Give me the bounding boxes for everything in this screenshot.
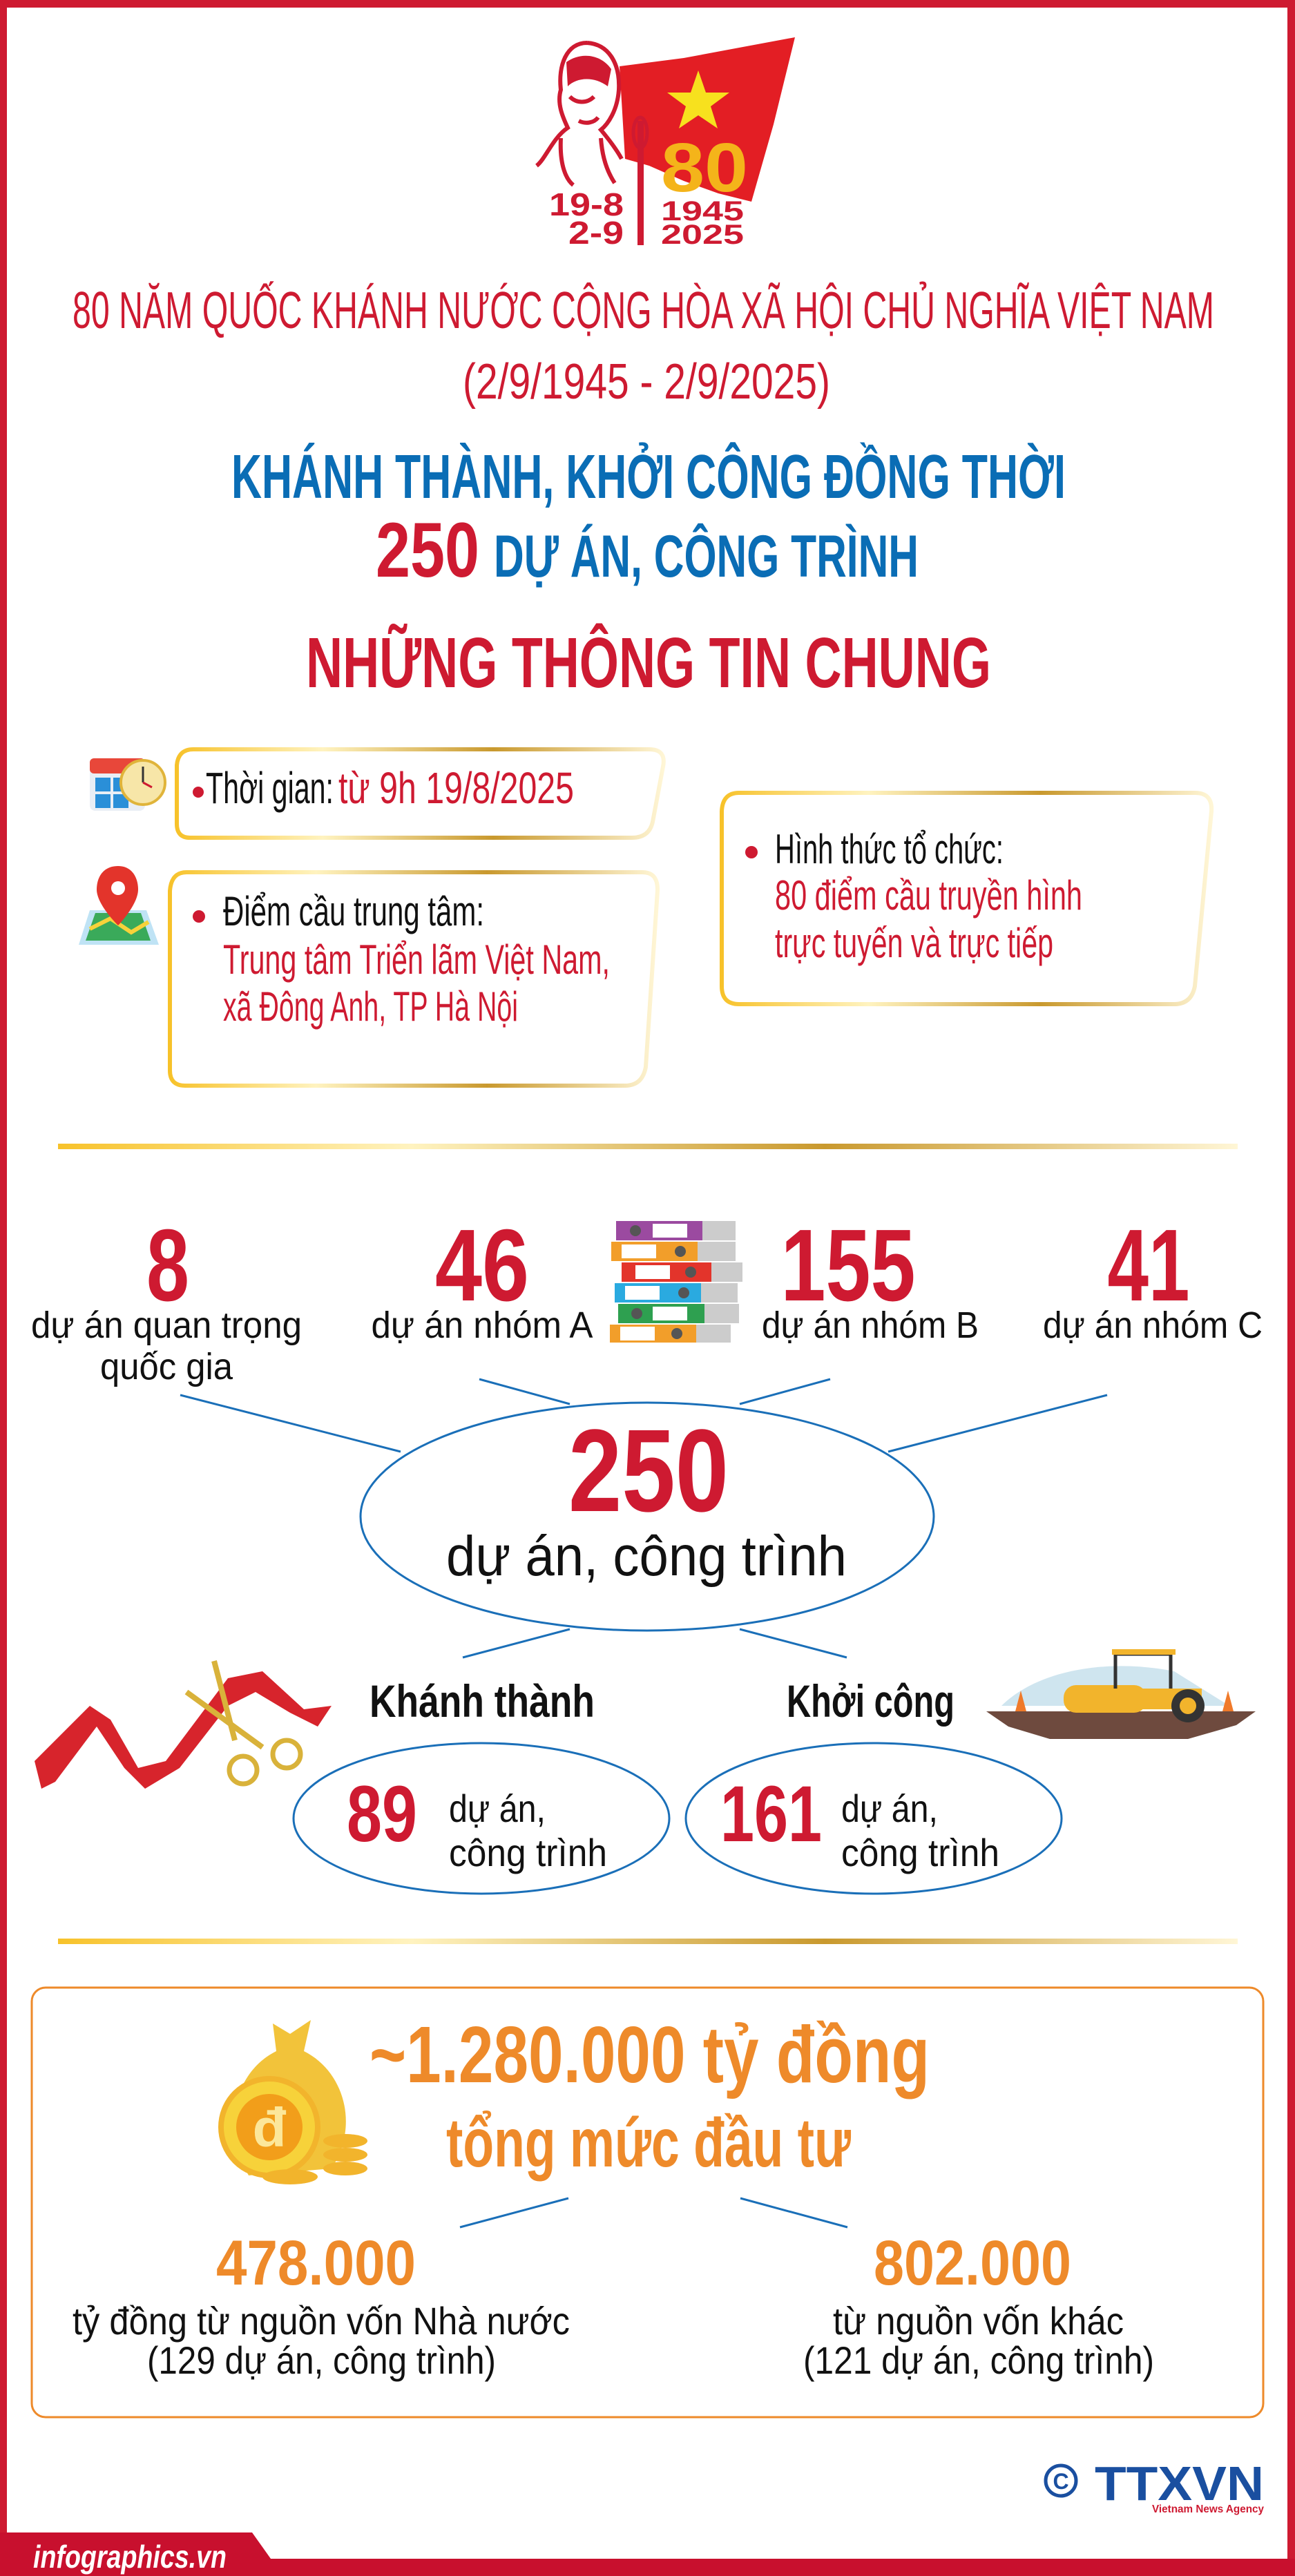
panel: central venue: Điểm cầu trung tâm: [223,888,484,934]
label: inauguration: Khánh thành [370,1675,595,1727]
ellipse: inaugurated 89 [294,1743,669,1894]
icon: money bag [221,2020,367,2184]
stat: group A [372,1209,593,1346]
panel: format: Hình thức tổ chức: [775,826,1004,872]
other sources [803,2228,1154,2382]
panel: time: từ 9h 19/8/2025 [338,763,574,813]
stat: national projects: quốc gia [100,1346,233,1387]
headline 250 projects: DỰ ÁN, CÔNG TRÌNH [494,523,919,590]
logo: 80 years national day: 1945 [661,196,744,227]
logo: TTXVN [1046,2457,1264,2515]
logo: TTXVN: Vietnam News Agency [1152,2503,1264,2515]
icon: calendar clock [90,758,165,811]
label: groundbreaking: Khởi công [787,1675,955,1727]
panel: central venue: Trung tâm Triển lãm Việt Nam, [223,936,610,983]
logo: 80 years national day: 2025 [661,220,744,250]
stat: group B: dự án nhóm B [762,1305,979,1346]
stat: group A: 46 [435,1209,529,1323]
title line 2: (2/9/1945 - 2/9/2025) [463,354,830,410]
logo: 80 years national day [537,37,795,251]
ellipse: started 161: công trình [841,1831,999,1874]
stat: group C [1043,1209,1263,1346]
panel: format [722,793,1211,1004]
stat: group B [762,1209,979,1346]
panel: investment: tổng mức đầu tư [446,2104,851,2182]
logo: 80 years national day: 2-9 [568,215,624,251]
state budget: tỷ đồng từ nguồn vốn Nhà nước [73,2299,570,2343]
other sources: từ nguồn vốn khác [833,2299,1124,2343]
ellipse: inaugurated 89: công trình [449,1831,607,1874]
panel: time [177,749,664,838]
logo: 80 years national day: 19-8 [549,186,624,222]
ellipse: inaugurated 89: dự án, [449,1787,546,1830]
stat: group C: 41 [1108,1209,1189,1323]
panel: investment [32,1988,1263,2417]
stat: group B: 155 [780,1209,916,1323]
headline 250 projects [376,507,919,593]
icon: binders stack [610,1221,742,1343]
state budget [73,2228,570,2382]
total investment: ~1.280.000 tỷ đồng [370,2010,930,2099]
total ellipse 250: 250 [568,1405,729,1537]
stat: national projects: 8 [146,1209,189,1323]
panel: central venue [170,872,658,1086]
logo: 80 years national day: 80 [661,129,748,206]
stat: group C: dự án nhóm C [1043,1305,1263,1346]
connector lines [180,1379,1107,1657]
stat: national projects: dự án quan trọng [31,1305,302,1346]
icon: ribbon and scissors [35,1661,332,1789]
state budget: (129 dự án, công trình) [147,2338,496,2382]
ellipse: started 161: dự án, [841,1787,938,1830]
stat: national projects [31,1209,302,1387]
total ellipse 250 [361,1403,934,1631]
logo: TTXVN: C [1053,2469,1069,2494]
total ellipse 250: dự án, công trình [446,1525,847,1588]
panel: central venue: xã Đông Anh, TP Hà Nội [223,983,518,1030]
other sources: (121 dự án, công trình) [803,2338,1154,2382]
stat: group A: dự án nhóm A [372,1305,593,1346]
headline 250 projects: 250 [376,507,479,593]
panel: format: trực tuyến và trực tiếp [775,920,1053,966]
ellipse: started 161 [686,1743,1062,1894]
footer band [0,2532,1295,2576]
panel: format: 80 điểm cầu truyền hình [775,872,1082,919]
icon: road roller [986,1649,1256,1739]
icon: map pin [79,866,159,945]
state budget: 478.000 [216,2228,416,2298]
ellipse: started 161: 161 [720,1770,822,1858]
logo: TTXVN: TTXVN [1095,2457,1264,2510]
footer band: infographics.vn [33,2539,227,2575]
other sources: 802.000 [874,2228,1071,2298]
icon: money bag: đ [253,2097,287,2158]
section heading: NHỮNG THÔNG TIN CHUNG [306,622,991,702]
ellipse: inaugurated 89: 89 [347,1770,417,1858]
panel: time: Thời gian: [206,763,334,813]
